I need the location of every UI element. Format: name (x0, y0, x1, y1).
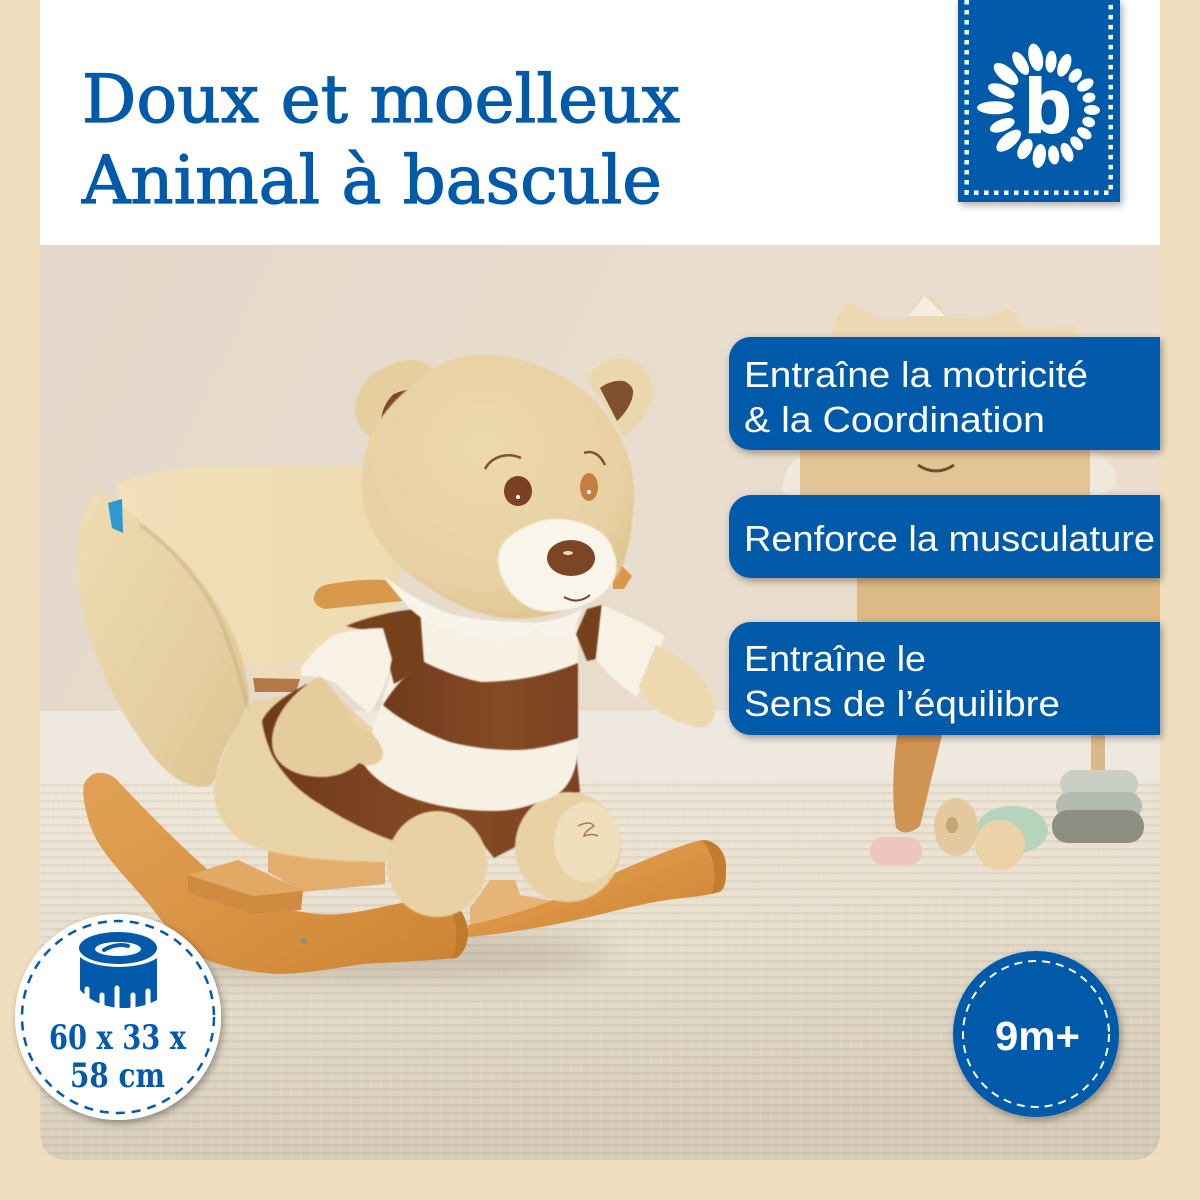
pill: équilibre: Entraîne le (744, 638, 926, 679)
wooden handle (314, 580, 403, 609)
right hand (639, 645, 715, 728)
seat (214, 696, 392, 862)
right foot (515, 792, 621, 902)
right eye (580, 473, 598, 501)
age badge (953, 951, 1119, 1117)
stacking toys (870, 770, 1144, 870)
pill: musculature: Renforce la musculature (744, 518, 1155, 559)
chair wing (77, 491, 249, 787)
pill: motricité: Entraîne la motricité (744, 354, 1088, 395)
nose (547, 540, 595, 576)
chair back (116, 466, 400, 668)
size text: 58 cm (70, 1056, 165, 1096)
benefit pills (729, 337, 1160, 735)
title: Animal à bascule (81, 142, 662, 219)
right ear (587, 359, 653, 437)
left eye (504, 476, 532, 506)
rocker shadow (70, 929, 610, 981)
shirt white body (363, 618, 578, 811)
mouth (564, 595, 590, 601)
under-seat slats (268, 850, 385, 892)
logo petals (977, 42, 1100, 169)
wall (40, 245, 1160, 715)
table top (857, 578, 1160, 622)
shirt brown stripe (383, 661, 578, 750)
logo letter b: b (1025, 64, 1071, 149)
plush toy (782, 296, 1117, 495)
title: Doux et moelleux (82, 61, 680, 138)
rocking bear (77, 355, 726, 974)
head (362, 355, 634, 619)
pill: musculature (729, 495, 1160, 578)
right rocker (468, 840, 726, 937)
chair strap (253, 678, 300, 692)
size text: 60 x 33 x (49, 1018, 187, 1058)
shirt brown left shoulder (346, 609, 424, 684)
seat cushion strip (253, 668, 305, 680)
right sleeve (596, 605, 665, 697)
brown shorts panel (262, 684, 580, 858)
left foot (387, 811, 487, 917)
logo tag (958, 0, 1120, 202)
pill: motricité (729, 337, 1160, 450)
size text (49, 1018, 187, 1096)
far table leg (1091, 735, 1105, 770)
baseboard (40, 711, 1160, 781)
wing seam (140, 525, 248, 708)
shirt brown right shoulder (576, 605, 602, 661)
size badge (15, 914, 221, 1120)
pill: équilibre: Sens de l’équilibre (744, 683, 1060, 724)
muzzle (498, 519, 616, 612)
header panel (40, 0, 1160, 246)
eyebrows (485, 452, 605, 469)
footrest (188, 860, 303, 914)
background toy and table (782, 296, 1160, 833)
pill: motricité: & la Coordination (744, 399, 1045, 440)
product photo (40, 245, 1160, 1160)
table leg (893, 735, 942, 833)
icon: tape measure (79, 932, 157, 1016)
left ear (354, 360, 433, 438)
collar (386, 576, 582, 626)
title (81, 61, 680, 219)
left rocker (83, 773, 468, 974)
carpet (40, 780, 1160, 1160)
left hand (272, 676, 383, 777)
left sleeve (301, 628, 392, 713)
age badge: 9m+ (995, 1013, 1080, 1059)
chair label (108, 499, 123, 533)
pill: équilibre (729, 622, 1160, 735)
